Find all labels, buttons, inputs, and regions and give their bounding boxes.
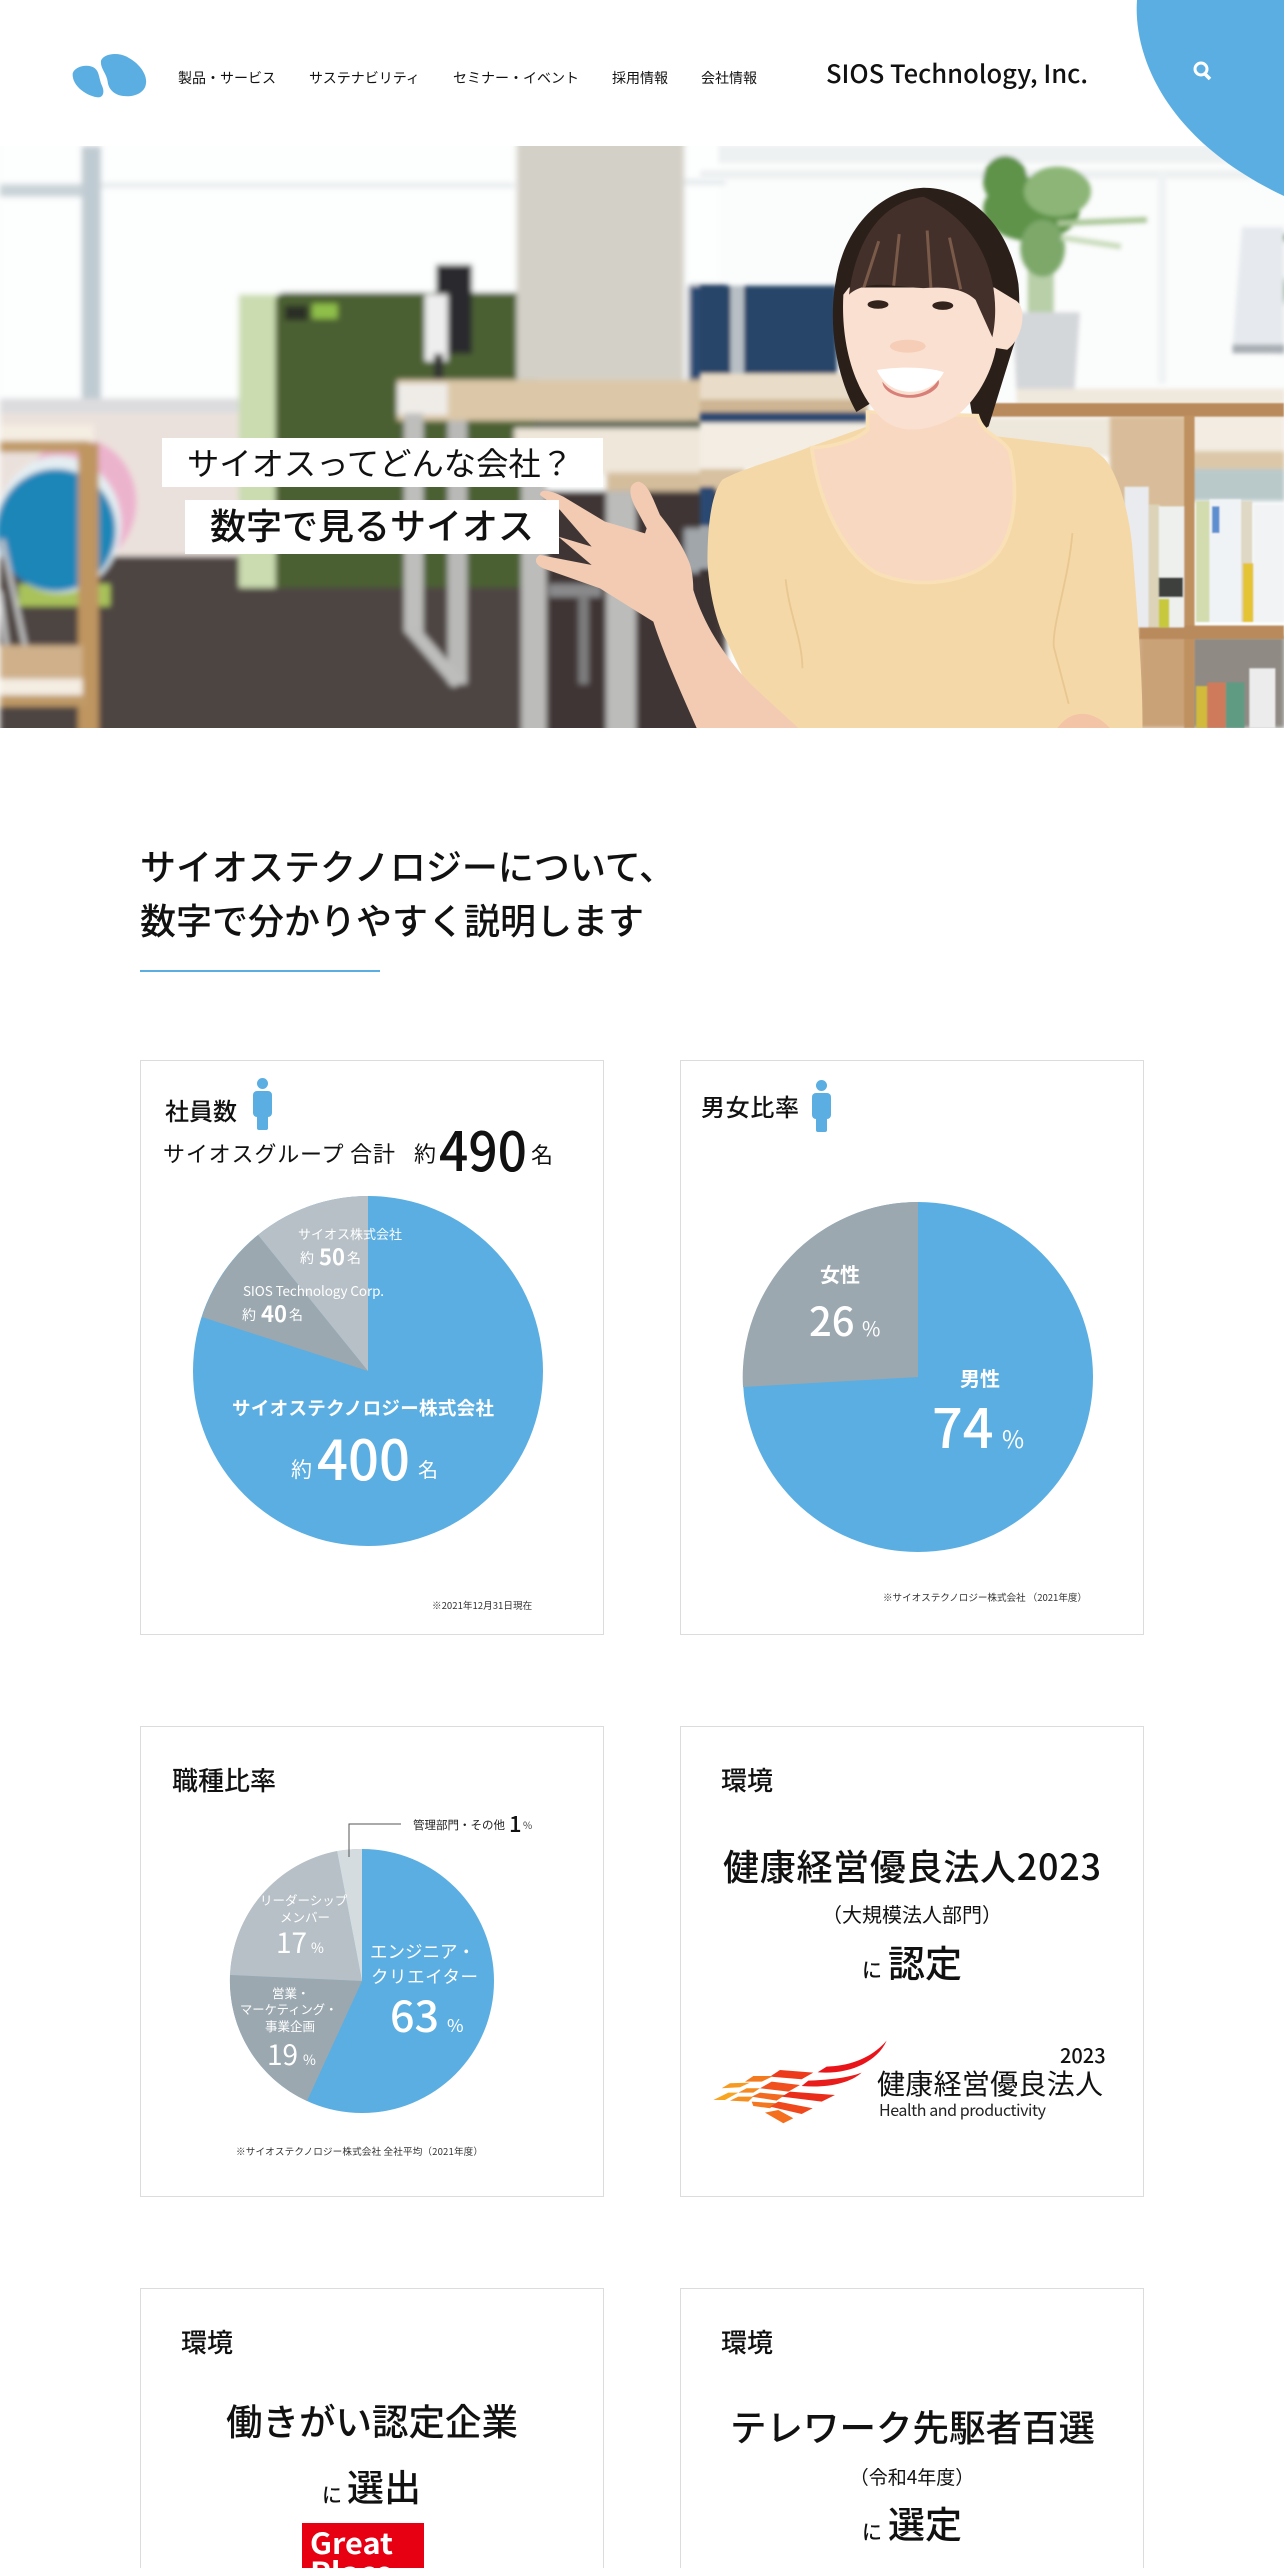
label: SIOS Technology: 名: [418, 1454, 438, 1483]
label: SIOS Corp: 名: [347, 1248, 361, 1268]
woman: [707, 188, 1142, 728]
navigation menu: 製品・サービス: [178, 68, 276, 88]
mouth: [877, 368, 944, 392]
hero heading: [162, 438, 603, 554]
eyes: [868, 300, 888, 309]
label: SIOS Technology: [232, 1395, 494, 1496]
pot: [1013, 312, 1080, 402]
panel: employees: [140, 1060, 604, 1634]
label: SIOS Technology Corp.: [242, 1280, 384, 1329]
label: SIOS Technology Corp.: 名: [289, 1305, 303, 1325]
award subtitle: （大規模法人部門）: [822, 1899, 1002, 1928]
monitor: [1233, 227, 1284, 355]
section heading: サイオステクノロジーについて、: [140, 839, 675, 891]
logo: Great Place to Work: [302, 2521, 424, 2568]
icon: SIOS logo: [73, 54, 146, 97]
label: engineers: %: [447, 2012, 464, 2038]
panel: telework pioneers: [680, 2288, 1144, 2568]
face: [843, 287, 1023, 430]
office background right: [700, 145, 1284, 729]
footnote: ※2021年12月31日現在: [432, 1598, 532, 1612]
label: male: 74: [932, 1385, 994, 1464]
logo text: 健康経営優良法人: [877, 2063, 1103, 2103]
heading: environment: 環境: [721, 2323, 773, 2360]
label: SIOS Technology Corp.: 約: [242, 1305, 256, 1325]
bangs: [849, 197, 995, 337]
label: engineers: 63: [390, 1983, 439, 2045]
award result: [864, 2506, 960, 2542]
award result: 認定: [888, 1934, 962, 1988]
navigation menu: サステナビリティ: [309, 68, 420, 88]
label: leadership: [260, 1890, 348, 1962]
logo: health and productivity: [713, 2040, 1106, 2123]
icon: person: [812, 1080, 831, 1132]
panel: health management: [680, 1726, 1144, 2196]
bang strands: [864, 231, 961, 289]
navigation menu: 会社情報: [701, 68, 757, 88]
logo text: [877, 2040, 1106, 2121]
section heading: [140, 839, 675, 972]
heading: environment: 環境: [181, 2323, 233, 2360]
label: male: [932, 1363, 1024, 1464]
label: female: 26: [809, 1290, 855, 1348]
logo: Great Place to Work: Great: [310, 2521, 393, 2563]
logo text: Health and productivity: [879, 2097, 1047, 2121]
label: sales: 事業企画: [265, 2016, 315, 2035]
plant: [983, 156, 1284, 312]
award subtitle: （令和4年度）: [850, 2463, 974, 2490]
label: sales: マーケティング・: [240, 2000, 337, 2018]
award result: に: [862, 2516, 882, 2545]
label: sales: 営業・: [272, 1983, 310, 2002]
award title: 健康経営優良法人2023: [723, 1839, 1101, 1891]
group total: 名: [531, 1138, 553, 1170]
nose shadow: [890, 340, 926, 353]
navigation menu: 採用情報: [612, 68, 668, 88]
heading: job type: 職種比率: [172, 1761, 276, 1798]
logo text: 2023: [1060, 2040, 1106, 2069]
label: sales: [240, 1983, 337, 2074]
label: SIOS Technology: サイオステクノロジー株式会社: [232, 1395, 494, 1421]
label: male: %: [1002, 1420, 1024, 1455]
icon: checker wave: [713, 2041, 887, 2123]
hero photo: [0, 131, 1284, 744]
group total: 490: [439, 1108, 527, 1187]
panel: gender ratio: [680, 1060, 1144, 1634]
label: SIOS Corp: 約: [300, 1248, 314, 1268]
label: leadership: 17: [276, 1922, 307, 1962]
award result: 選定: [888, 2495, 962, 2549]
heading: environment: 環境: [721, 1761, 773, 1798]
desks: [700, 374, 868, 400]
books and shelf: [983, 403, 1284, 728]
label: SIOS Corp: サイオス株式会社: [298, 1224, 402, 1243]
header: [73, 54, 1088, 97]
footnote: ※サイオステクノロジー株式会社 全社平均（2021年度）: [236, 2144, 483, 2158]
heading box: numbers: 数字で見るサイオス: [210, 498, 534, 550]
label: SIOS Corp: [298, 1224, 402, 1272]
company name: SIOS Technology, Inc.: [826, 55, 1088, 91]
search blob with icon: [1137, 0, 1284, 196]
label: SIOS Technology Corp.: SIOS Technology Corp.: [243, 1280, 384, 1300]
panels: [700, 286, 731, 375]
label: sales: %: [303, 2050, 316, 2070]
heading: gender ratio: 男女比率: [701, 1088, 799, 1123]
forearm and hand: [536, 482, 798, 728]
award result: [324, 2470, 418, 2504]
neck and chest: [812, 412, 1014, 583]
award title: テレワーク先駆者百選: [730, 2399, 1095, 2452]
award title: 働きがい認定企業: [226, 2393, 518, 2446]
label: SIOS Technology: 400: [317, 1416, 410, 1496]
panel: job type ratio: [140, 1726, 604, 2196]
office background left: [0, 131, 728, 744]
label: SIOS Technology Corp.: 40: [261, 1297, 287, 1329]
callout: admin: 管理部門・その他: [413, 1817, 506, 1833]
heading box: question: サイオスってどんな会社？: [187, 439, 573, 485]
pie chart: job type: [230, 1807, 532, 2113]
label: leadership: %: [311, 1938, 324, 1958]
label: SIOS Corp: 50: [319, 1240, 345, 1272]
label: engineers: [370, 1939, 478, 2045]
callout: admin: 1: [509, 1807, 522, 1839]
label: male: 男性: [960, 1363, 1000, 1392]
label: female: [809, 1259, 880, 1348]
pie chart: employees: [193, 1196, 543, 1546]
label: SIOS Technology: 約: [291, 1454, 312, 1484]
award result: 選出: [347, 2458, 421, 2512]
callout: admin: [349, 1807, 532, 1857]
navigation menu: セミナー・イベント: [453, 68, 579, 88]
far arm skin: [1058, 714, 1110, 728]
panel: great place to work: [140, 2288, 604, 2568]
label: engineers: エンジニア・: [370, 1939, 475, 1964]
pie chart: gender: [743, 1202, 1093, 1552]
sweater: [707, 426, 1142, 728]
heading: employees: 社員数: [165, 1092, 237, 1127]
label: sales: 19: [267, 2034, 298, 2074]
group total: サイオスグループ 合計: [163, 1137, 395, 1169]
section heading: 数字で分かりやすく説明します: [140, 893, 644, 945]
group total: [163, 1108, 553, 1187]
navigation menu: [178, 68, 757, 88]
label: female: 女性: [820, 1259, 860, 1288]
label: leadership: メンバー: [280, 1907, 330, 1926]
award result: に: [862, 1954, 882, 1983]
hair back: [833, 188, 1019, 435]
callout: admin: %: [523, 1817, 532, 1832]
group total: 約: [414, 1137, 436, 1169]
label: female: %: [862, 1313, 880, 1342]
label: engineers: クリエイター: [371, 1964, 478, 1989]
label: leadership: リーダーシップ: [260, 1890, 348, 1909]
footnote: ※サイオステクノロジー株式会社 （2021年度）: [883, 1590, 1087, 1604]
icon: person: [253, 1078, 272, 1130]
award result: に: [322, 2479, 342, 2508]
